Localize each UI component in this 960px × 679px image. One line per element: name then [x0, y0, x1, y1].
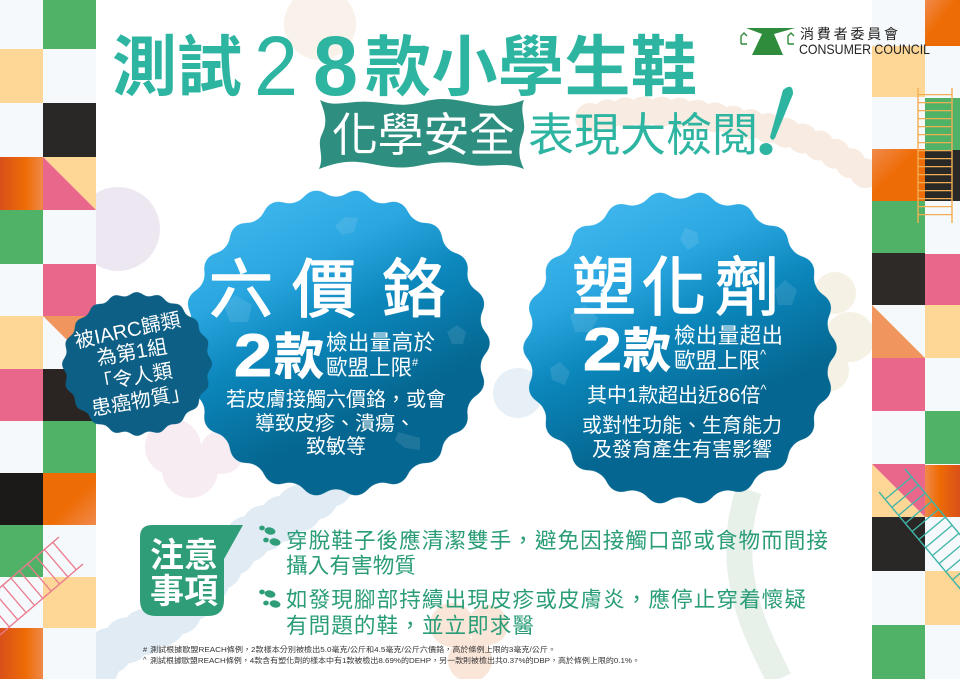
title: 8	[313, 19, 358, 113]
heading: 塑化劑	[572, 252, 779, 324]
starburst background	[190, 197, 482, 489]
detail: ^	[760, 382, 767, 397]
exceedance note: #	[412, 357, 419, 369]
decorative hexagons	[550, 228, 797, 385]
panel: precautions label	[140, 525, 243, 616]
health effects	[226, 388, 446, 458]
text: wash hands: 穿脫鞋子後應清潔雙手，避免因接觸口部或食物而間接	[286, 528, 828, 553]
right checker column	[872, 0, 960, 679]
footnotes: ^	[143, 655, 147, 664]
exceedance note: 檢出量高於	[326, 331, 435, 355]
text: wash hands: 攝入有害物質	[286, 553, 416, 578]
count: 款	[623, 325, 671, 378]
count: 2	[583, 316, 622, 383]
health effects: 致敏等	[306, 435, 366, 458]
text: stop wearing: 如發現腳部持續出現皮疹或皮膚炎，應停止穿着懷疑	[286, 587, 806, 612]
title: 款小學生鞋	[365, 30, 697, 104]
health effects: 及發育產生有害影響	[592, 438, 772, 461]
badge text: 為第1組	[95, 335, 169, 370]
health effects	[582, 414, 782, 461]
exceedance note	[326, 331, 435, 380]
title: 2	[254, 19, 298, 113]
panel: precautions label: 注意	[150, 537, 218, 575]
badge text	[73, 308, 192, 421]
exceedance note: 歐盟上限	[326, 356, 412, 380]
starburst background	[531, 199, 829, 497]
exceedance note: ^	[760, 347, 767, 362]
footnotes: 測試根據歐盟REACH條例，4款含有塑化劑的樣本中有1款被檢出8.69%的DEHP，另一款則被檢出共0.37%的DBP，高於條例上限的0.1%。	[150, 656, 640, 665]
badge shape	[67, 297, 207, 431]
footnotes	[143, 645, 640, 665]
footnotes: 測試根據歐盟REACH條例，2款樣本分別被檢出5.0毫克/公斤和4.5毫克/公斤六價鉻，高於條例上限的3毫克/公斤。	[150, 645, 556, 654]
text: stop wearing: 有問題的鞋，並立即求醫	[286, 613, 534, 638]
title	[112, 19, 697, 113]
left checker column	[0, 0, 96, 679]
decorative hexagons	[224, 217, 466, 450]
callout: IARC group 1	[67, 297, 207, 431]
exceedance note: 檢出量超出	[674, 324, 783, 348]
detail: 其中1款超出近86倍	[587, 385, 760, 407]
health effects: 導致皮疹、潰瘍、	[255, 412, 415, 435]
exceedance note: 歐盟上限	[674, 349, 760, 373]
icon: footprints 1	[259, 526, 281, 547]
logo: consumer council	[741, 26, 930, 57]
health effects: 或對性功能、生育能力	[582, 414, 782, 437]
logo: consumer council: CONSUMER COUNCIL	[799, 41, 930, 57]
panel: precautions label: 事項	[150, 573, 218, 611]
text: wash hands	[286, 528, 828, 578]
count: 2	[234, 322, 272, 389]
logo: consumer council: 消費者委員會	[800, 26, 898, 42]
text: stop wearing	[286, 587, 806, 638]
footnotes: #	[143, 645, 148, 654]
badge text: 患癌物質」	[90, 381, 192, 421]
subtitle badge: chemical safety: 化學安全	[332, 109, 515, 161]
count	[234, 322, 324, 389]
panel: hexavalent chromium	[190, 197, 482, 489]
exclamation mark	[760, 87, 793, 155]
count: 款	[274, 329, 324, 385]
title: 測試	[112, 30, 242, 104]
icon: footprints 2	[259, 589, 281, 609]
exceedance note	[674, 324, 783, 373]
subtitle badge: chemical safety	[319, 99, 524, 169]
panel: plasticizers	[531, 199, 829, 497]
ladder: orange	[918, 88, 952, 223]
badge text: 被IARC歸類	[73, 308, 183, 353]
heading: 六價鉻	[209, 254, 446, 326]
health effects: 若皮膚接觸六價鉻，或會	[226, 388, 446, 411]
subtitle: performance review: 表現大檢閱	[528, 109, 758, 161]
ladder: teal	[879, 469, 960, 591]
count	[583, 316, 671, 383]
badge text: 「令人類	[91, 359, 174, 396]
ladder: pink	[0, 537, 83, 635]
